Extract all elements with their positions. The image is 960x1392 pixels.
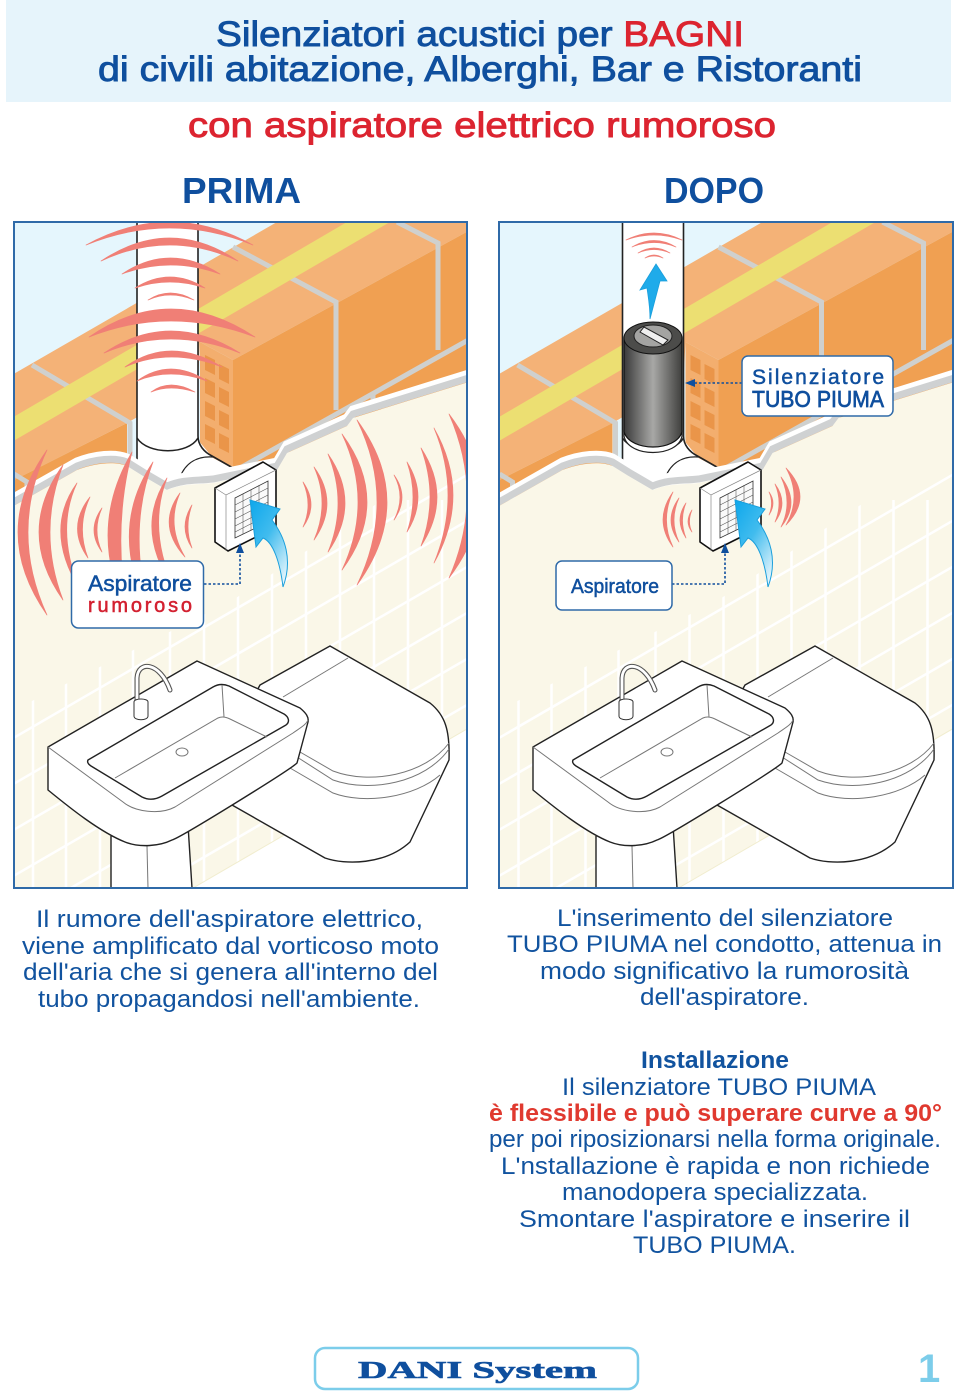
text block: installazione: TUBO PIUMA. (633, 1232, 796, 1259)
callout: aspiratore rumoroso: rumoroso (88, 595, 192, 617)
text block: installazione: è flessibile e può superare curve a 90° (489, 1100, 942, 1127)
text block: prima: dell'aria che si genera all'interno del (23, 959, 438, 986)
washbasin and toilet (533, 646, 934, 888)
callout: silenziatore tubo piuma: TUBO PIUMA (752, 386, 885, 412)
text block: installazione: Il silenziatore TUBO PIUMA (562, 1074, 876, 1101)
title band: di civili abitazione, Alberghi, Bar e Ristoranti (98, 50, 862, 89)
icon: exhaust fan (215, 462, 276, 551)
brick wall, pipe and tiled wall (496, 218, 958, 900)
text block: prima: tubo propagandosi nell'ambiente. (38, 986, 420, 1013)
panel: dopo (496, 218, 958, 900)
arrow: airflow into fan (250, 500, 287, 587)
callout: aspiratore rumoroso: Aspiratore (88, 571, 192, 596)
text block: prima: Il rumore dell'aspiratore elettrico, (36, 906, 423, 933)
heading: PRIMA: PRIMA (182, 170, 301, 211)
sound waves in pipe (86, 222, 255, 392)
sound waves left of fan (18, 450, 192, 615)
reduced sound waves left of fan (663, 492, 692, 547)
text block: installazione: per poi riposizionarsi nella forma originale. (489, 1126, 941, 1153)
text block: installazione: L'nstallazione è rapida e non richiede (501, 1153, 930, 1180)
text block: dopo (507, 905, 942, 1011)
text block: dopo: modo significativo la rumorosità (540, 958, 910, 985)
icon: exhaust fan (700, 462, 761, 551)
text block: dopo: L'inserimento del silenziatore (557, 905, 893, 932)
callout: aspiratore (556, 543, 729, 610)
callout: aspiratore: Aspiratore (571, 576, 659, 598)
arrow: airflow into fan (735, 500, 772, 587)
washbasin and toilet (48, 646, 449, 888)
page number: 1 (918, 1347, 940, 1391)
footer logo: DANI System (315, 1348, 638, 1389)
silenziatore tubo piuma (624, 322, 682, 452)
callout: silenziatore tubo piuma: Silenziatore (752, 366, 884, 389)
subtitle: con aspiratore elettrico rumoroso (188, 106, 776, 145)
brick wall, pipe and tiled wall (10, 218, 472, 900)
reduced sound waves right of fan (769, 468, 800, 527)
heading: DOPO: DOPO (664, 170, 764, 211)
text block: prima (22, 906, 439, 1013)
arrow: airflow up the pipe (640, 264, 667, 319)
title band (6, 0, 951, 102)
text block: installazione: manodopera specializzata. (562, 1179, 868, 1206)
footer logo: DANI System: DANI System (358, 1358, 597, 1384)
callout: silenziatore tubo piuma (685, 356, 893, 416)
reduced sound waves in pipe (626, 233, 682, 258)
callout: aspiratore rumoroso (72, 543, 244, 628)
text block: installazione: Installazione (641, 1047, 789, 1074)
title band: Silenziatori acustici per BAGNI (216, 15, 744, 54)
panel: prima (10, 218, 480, 900)
text block: dopo: TUBO PIUMA nel condotto, attenua in (507, 931, 942, 958)
text block: installazione: Smontare l'aspiratore e inserire il (519, 1206, 910, 1233)
sound waves right of fan (303, 414, 480, 585)
text block: installazione (489, 1047, 942, 1259)
text block: dopo: dell'aspiratore. (640, 984, 809, 1011)
text block: prima: viene amplificato dal vorticoso moto (22, 933, 439, 960)
